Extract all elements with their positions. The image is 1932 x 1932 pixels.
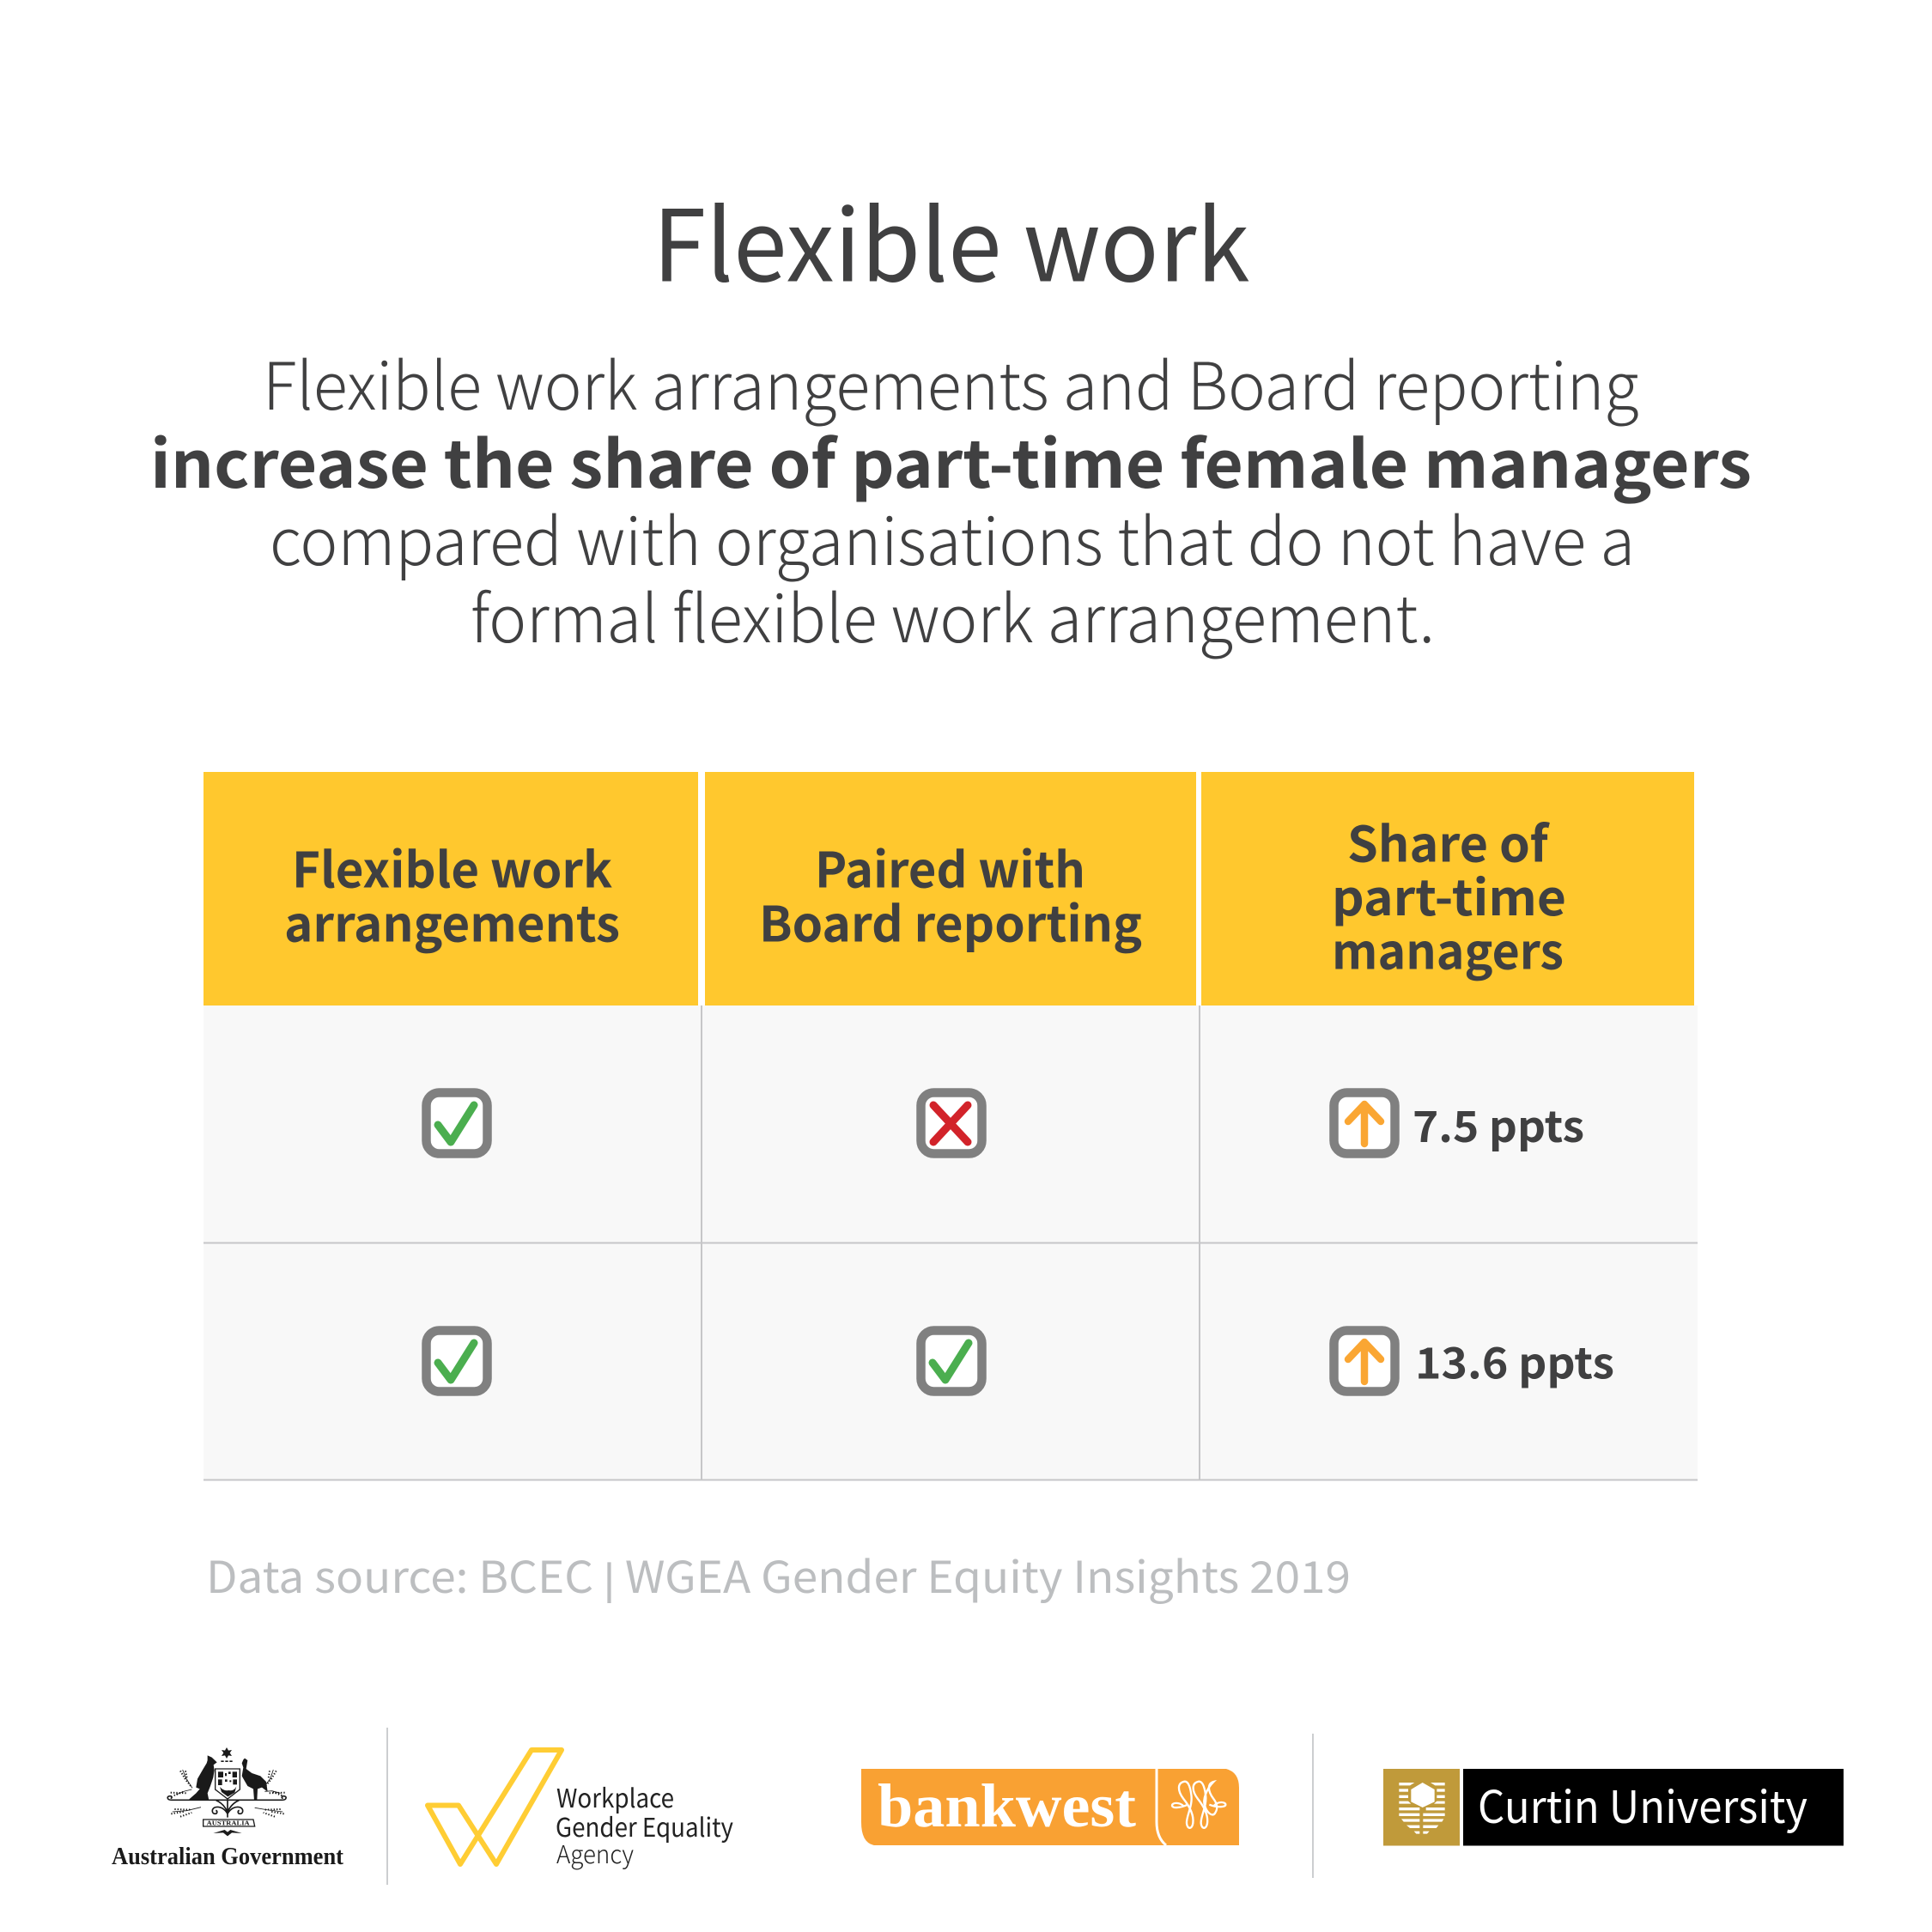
emu bbox=[242, 1759, 268, 1801]
label: agency name bbox=[556, 1777, 733, 1871]
table body background bbox=[204, 1005, 1698, 1479]
header cell: paired with board reporting: Board reporting bbox=[759, 886, 1142, 957]
orange badge bbox=[861, 1769, 1239, 1845]
compartment bar bbox=[167, 1796, 286, 1800]
ribbon bbox=[204, 1820, 255, 1826]
logo: Workplace Gender Equality Agency bbox=[428, 1750, 733, 1871]
value: 7.5 ppts: 7.5 ppts bbox=[1413, 1093, 1584, 1155]
icon: coat of arms bbox=[167, 1747, 286, 1836]
badge separator bbox=[1157, 1769, 1166, 1845]
comparison table bbox=[204, 772, 1698, 1480]
header cell: share of part-time managers: managers bbox=[1332, 914, 1564, 984]
label: agency name: Gender Equality bbox=[556, 1807, 733, 1844]
subtitle text block: formal flexible work arrangement. bbox=[471, 567, 1435, 661]
divider bbox=[1312, 1734, 1314, 1878]
logo: Australian Government bbox=[112, 1747, 344, 1870]
logo: Curtin University bbox=[1383, 1769, 1844, 1846]
subtitle text block: compared with organisations that do not have a bbox=[270, 489, 1635, 584]
label: agency name: Workplace bbox=[556, 1777, 674, 1815]
icon: row 2 flexible tick bbox=[426, 1331, 488, 1391]
icon: coat of arms: AUSTRALIA bbox=[207, 1820, 250, 1827]
icon: row 2 up arrow bbox=[1334, 1331, 1394, 1391]
logo: Bankwest bbox=[861, 1769, 1239, 1845]
label: Australian Government: Australian Government bbox=[112, 1844, 344, 1870]
gold shield block bbox=[1383, 1769, 1460, 1846]
header cell: share of part-time managers bbox=[1201, 772, 1694, 1005]
icon: row 1 board cross bbox=[920, 1092, 982, 1154]
crest star bbox=[222, 1747, 232, 1759]
title: Flexible work bbox=[653, 168, 1250, 311]
subtitle text block: increase the share of part-time female managers bbox=[150, 412, 1752, 507]
header cell: flexible work arrangements bbox=[204, 772, 698, 1005]
subtitle text block bbox=[150, 334, 1752, 661]
icon: shield bbox=[1399, 1783, 1445, 1834]
header cell: flexible work arrangements: arrangements bbox=[284, 886, 620, 957]
black wordmark block bbox=[1463, 1769, 1844, 1846]
value: 13.6 ppts: 13.6 ppts bbox=[1415, 1329, 1614, 1391]
kangaroo bbox=[189, 1755, 217, 1801]
table grid lines bbox=[204, 1005, 1698, 1480]
icon: row 1 flexible tick bbox=[426, 1092, 488, 1154]
header cell: flexible work arrangements: Flexible work bbox=[292, 831, 613, 902]
subtitle text block: Flexible work arrangements and Board reporting bbox=[263, 334, 1638, 428]
ribbon bow bbox=[213, 1830, 242, 1836]
header cell: share of part-time managers: Share of bbox=[1347, 805, 1551, 876]
shield bbox=[216, 1769, 240, 1799]
icon: ribbon emblem bbox=[1172, 1782, 1225, 1828]
icon: row 1 up arrow bbox=[1334, 1092, 1394, 1154]
wattle sprays bbox=[171, 1770, 285, 1818]
header cell: paired with board reporting: Paired with bbox=[815, 831, 1085, 902]
label: agency name: Agency bbox=[556, 1835, 634, 1871]
icon: row 2 board tick bbox=[920, 1331, 982, 1391]
divider bbox=[386, 1728, 388, 1885]
data source note: Data source: BCEC | WGEA Gender Equity Insights 2019 bbox=[206, 1542, 1351, 1606]
header cell: share of part-time managers: part-time bbox=[1332, 860, 1566, 930]
header cell: paired with board reporting bbox=[705, 772, 1196, 1005]
icon: yellow tick bbox=[428, 1750, 562, 1864]
wordmark: bankwest bbox=[878, 1771, 1136, 1840]
wordmark: Curtin University bbox=[1478, 1771, 1807, 1836]
